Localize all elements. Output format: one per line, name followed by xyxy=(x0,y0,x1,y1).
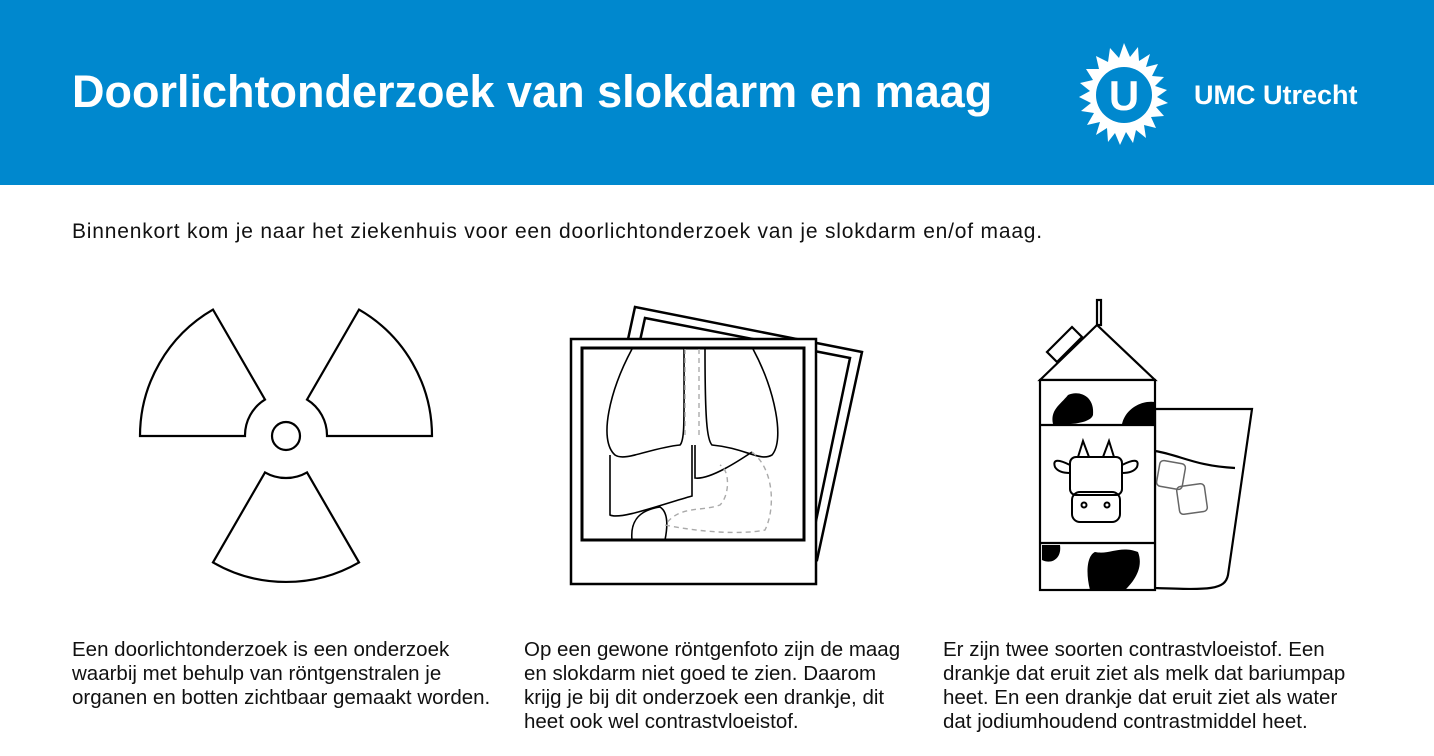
text: column 3: Er zijn twee soorten contrastvloeistof. Een xyxy=(943,638,1325,661)
text: column 3: heet. En een drankje dat eruit ziet als water xyxy=(943,686,1337,709)
text: column 2 xyxy=(524,638,900,733)
logo: UMC Utrecht xyxy=(1079,43,1358,145)
text: column 2: krijg je bij dit onderzoek een drankje, dit xyxy=(524,686,884,709)
text: column 3: drankje dat eruit ziet als melk dat bariumpap xyxy=(943,662,1345,685)
text: column 1: Een doorlichtonderzoek is een onderzoek xyxy=(72,638,449,661)
text: column 1: organen en botten zichtbaar gemaakt worden. xyxy=(72,686,490,709)
text: column 3: dat jodiumhoudend contrastmiddel heet. xyxy=(943,710,1308,733)
text: column 2: en slokdarm niet goed te zien. Daarom xyxy=(524,662,876,685)
logo: UMC Utrecht: UMC Utrecht xyxy=(1194,80,1358,110)
text: column 2: Op een gewone röntgenfoto zijn de maag xyxy=(524,638,900,661)
text: column 1: waarbij met behulp van röntgenstralen je xyxy=(72,662,441,685)
text: column 2: heet ook wel contrastvloeistof. xyxy=(524,710,799,733)
text: column 3 xyxy=(943,638,1345,733)
header banner xyxy=(0,0,1434,185)
intro text: Binnenkort kom je naar het ziekenhuis voor een doorlichtonderzoek van je slokdarm en/of maag. xyxy=(72,220,1043,243)
title: Doorlichtonderzoek van slokdarm en maag xyxy=(72,66,992,117)
text: column 1 xyxy=(72,638,490,709)
logo: UMC Utrecht: U xyxy=(1109,72,1139,119)
